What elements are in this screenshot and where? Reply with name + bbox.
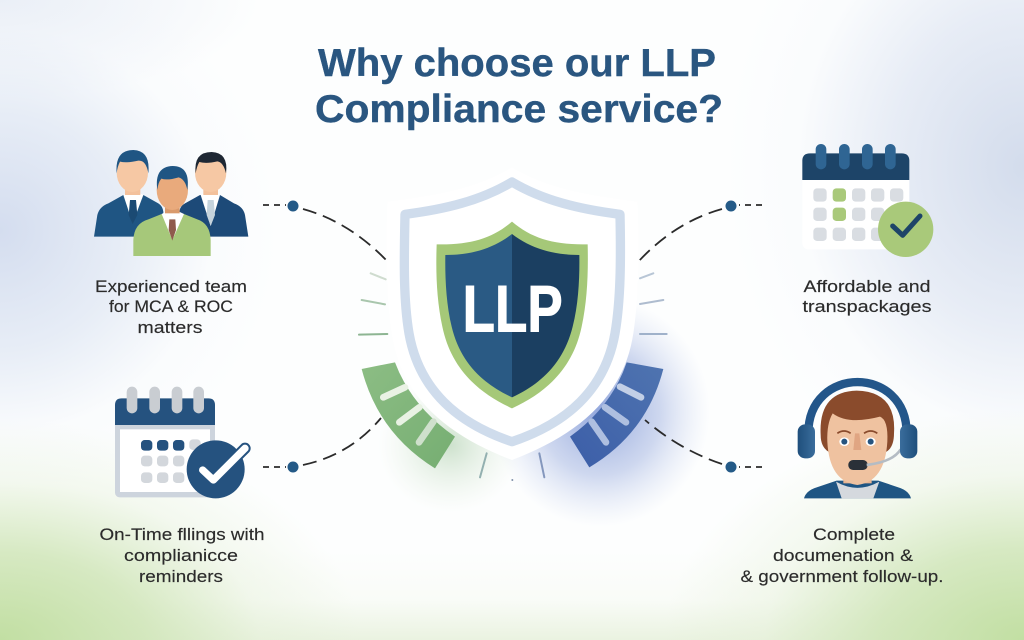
- navy shield right half: [512, 234, 579, 397]
- blue gauge arc: [570, 362, 663, 467]
- label: documentation: Complete: [813, 525, 895, 544]
- label: experienced team: [95, 277, 247, 337]
- connector: top right: [638, 200, 762, 262]
- middle man: [133, 166, 211, 256]
- label: experienced team: Experienced team: [95, 277, 247, 296]
- label: on-time filings: On-Time fllings with: [100, 525, 264, 544]
- title: Compliance service?: [315, 88, 723, 131]
- green inner shield: [436, 222, 588, 408]
- label: experienced team: for MCA & ROC: [109, 297, 233, 316]
- left man: [94, 150, 163, 237]
- title: Why choose our LLP: [318, 42, 716, 85]
- navy shield left half: [445, 234, 512, 397]
- light blue shield border: [404, 182, 620, 442]
- connector: bottom right: [645, 420, 762, 472]
- shield and gauge graphic: [359, 167, 667, 481]
- icon: calendar with check, right: [802, 144, 933, 257]
- label: affordable: transpackages: [802, 297, 932, 316]
- connector: bottom left: [263, 418, 381, 472]
- icon: team: [94, 150, 248, 256]
- title: [315, 42, 723, 131]
- outer white shield: [387, 167, 638, 460]
- glow behind shield: [378, 297, 710, 527]
- label: on-time filings: reminders: [139, 567, 223, 586]
- label: on-time filings: [100, 525, 264, 586]
- gauge ticks: [359, 273, 667, 481]
- icon: calendar with check, left: [115, 387, 245, 498]
- label: documentation: [740, 525, 944, 586]
- LLP label: LLP: [463, 272, 563, 346]
- label: documentation: documenation &: [773, 546, 914, 565]
- label: documentation: & government follow-up.: [740, 567, 944, 586]
- icon: support agent: [798, 382, 917, 498]
- label: affordable: Affordable and: [804, 277, 930, 296]
- right man: [179, 152, 248, 237]
- label: affordable: [802, 277, 932, 316]
- green gauge arc: [362, 362, 455, 468]
- label: on-time filings: complianicce: [124, 546, 238, 565]
- connector: top left: [263, 200, 388, 262]
- label: experienced team: matters: [138, 318, 202, 337]
